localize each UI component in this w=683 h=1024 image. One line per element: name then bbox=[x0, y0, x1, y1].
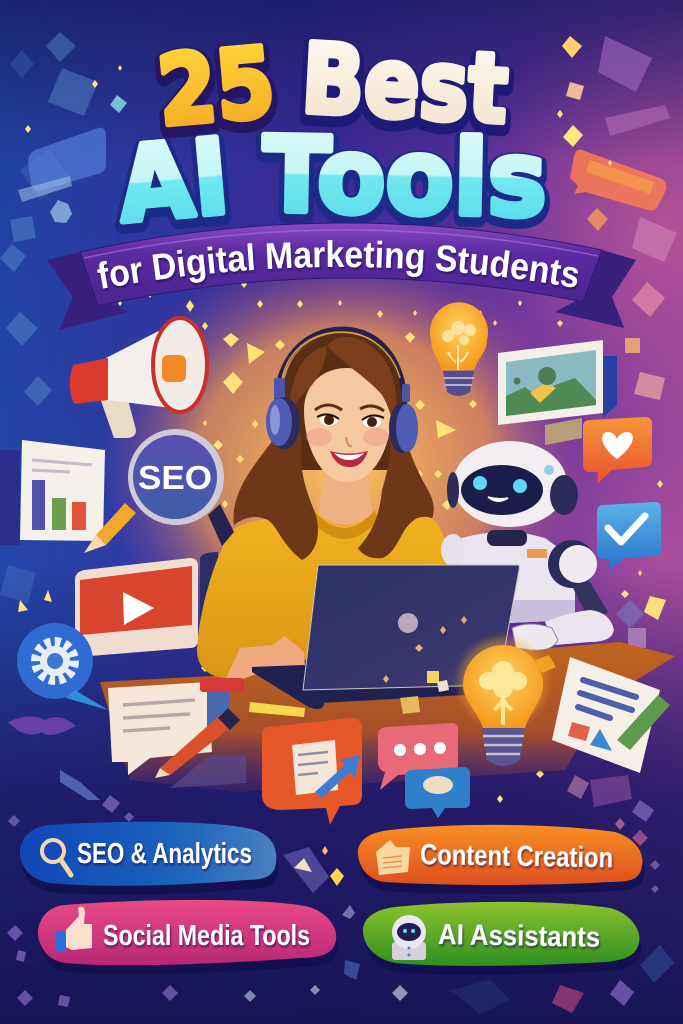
left hair lobe bbox=[234, 395, 318, 560]
confetti: centre scatter between pills bbox=[283, 846, 344, 893]
title words: AI Tools: AI bbox=[114, 119, 234, 250]
robot arm bbox=[548, 540, 596, 588]
pill: Content Creation bbox=[358, 825, 645, 894]
pill: AI Assistants: AI Assistants bbox=[438, 919, 600, 954]
small light bulb bbox=[430, 302, 488, 396]
pill: Social Media Tools bbox=[38, 900, 338, 974]
right hair lobe bbox=[358, 395, 434, 558]
title number: 25: 25 bbox=[154, 31, 279, 153]
neck bbox=[318, 470, 372, 524]
pill: Content Creation: Content Creation bbox=[420, 839, 613, 874]
confetti: gold sparkles bbox=[18, 65, 663, 803]
sweater bbox=[197, 511, 450, 678]
blue chat bubble bbox=[405, 767, 470, 818]
subtitle banner bbox=[47, 222, 636, 330]
pill: Social Media Tools: Social Media Tools bbox=[103, 920, 310, 952]
picture frame bbox=[498, 340, 617, 445]
left forearm and hand bbox=[226, 636, 305, 680]
title words: AI Tools bbox=[113, 114, 548, 250]
heart chat bubble bbox=[583, 417, 652, 484]
sweater collar bbox=[310, 510, 378, 539]
confetti: small dots and diamonds lower area bbox=[7, 770, 674, 1014]
chair bbox=[200, 552, 222, 650]
table bbox=[100, 642, 675, 792]
chat note with pencil bbox=[108, 678, 246, 788]
icon: magnifying glass bbox=[42, 840, 71, 875]
laptop bbox=[252, 565, 519, 709]
megaphone bbox=[70, 318, 207, 438]
title words: AI Tools: AI bbox=[113, 115, 234, 246]
subtitle text: for Digital Marketing Students bbox=[97, 240, 580, 292]
back hair bbox=[282, 333, 406, 470]
pill: AI Assistants bbox=[363, 902, 641, 975]
large light bulb bbox=[459, 638, 547, 766]
pink chat bubble with dots bbox=[378, 723, 458, 790]
title word: Best: Best bbox=[299, 23, 511, 145]
title bbox=[113, 23, 548, 250]
orange speech card with document bbox=[262, 718, 362, 825]
pill: SEO and Analytics bbox=[20, 822, 278, 895]
pill: SEO and Analytics: SEO & Analytics bbox=[77, 838, 252, 870]
title words: AI Tools: Tools bbox=[262, 118, 548, 244]
woman with headphones bbox=[197, 329, 450, 680]
report document with bar chart bbox=[0, 440, 105, 545]
title words: AI Tools: Tools bbox=[262, 114, 548, 240]
title number: 25: 25 bbox=[154, 26, 279, 148]
check chat bubble bbox=[597, 502, 661, 570]
sticky notes on table bbox=[249, 655, 556, 717]
face bbox=[304, 368, 391, 482]
right ear cup bbox=[389, 384, 418, 453]
SEO magnifier bbox=[128, 429, 234, 546]
facial features bbox=[315, 405, 384, 467]
pencil by report bbox=[84, 503, 136, 553]
icon: thumbs up bbox=[56, 907, 92, 951]
left ear cup bbox=[266, 378, 300, 449]
laptop logo bbox=[398, 613, 418, 633]
robot head bbox=[453, 441, 567, 527]
icon: robot bbox=[392, 915, 426, 960]
icon: notepad bbox=[376, 840, 410, 875]
blush bbox=[306, 428, 389, 446]
SEO magnifier: SEO bbox=[138, 459, 212, 496]
confetti: translucent blue shapes left bbox=[0, 32, 644, 628]
gear chat bubble bbox=[17, 623, 108, 710]
video player panel bbox=[75, 558, 198, 656]
document with pencil right bbox=[552, 657, 670, 773]
bangs bbox=[288, 337, 396, 425]
confetti: blue chat shape left bbox=[18, 95, 127, 223]
confetti: pink and orange shapes right bbox=[562, 36, 677, 648]
purple lips shape bbox=[8, 716, 76, 735]
headband bbox=[277, 329, 405, 408]
robot bbox=[441, 441, 614, 650]
title word: Best: Best bbox=[299, 28, 510, 150]
robot body bbox=[450, 532, 575, 625]
